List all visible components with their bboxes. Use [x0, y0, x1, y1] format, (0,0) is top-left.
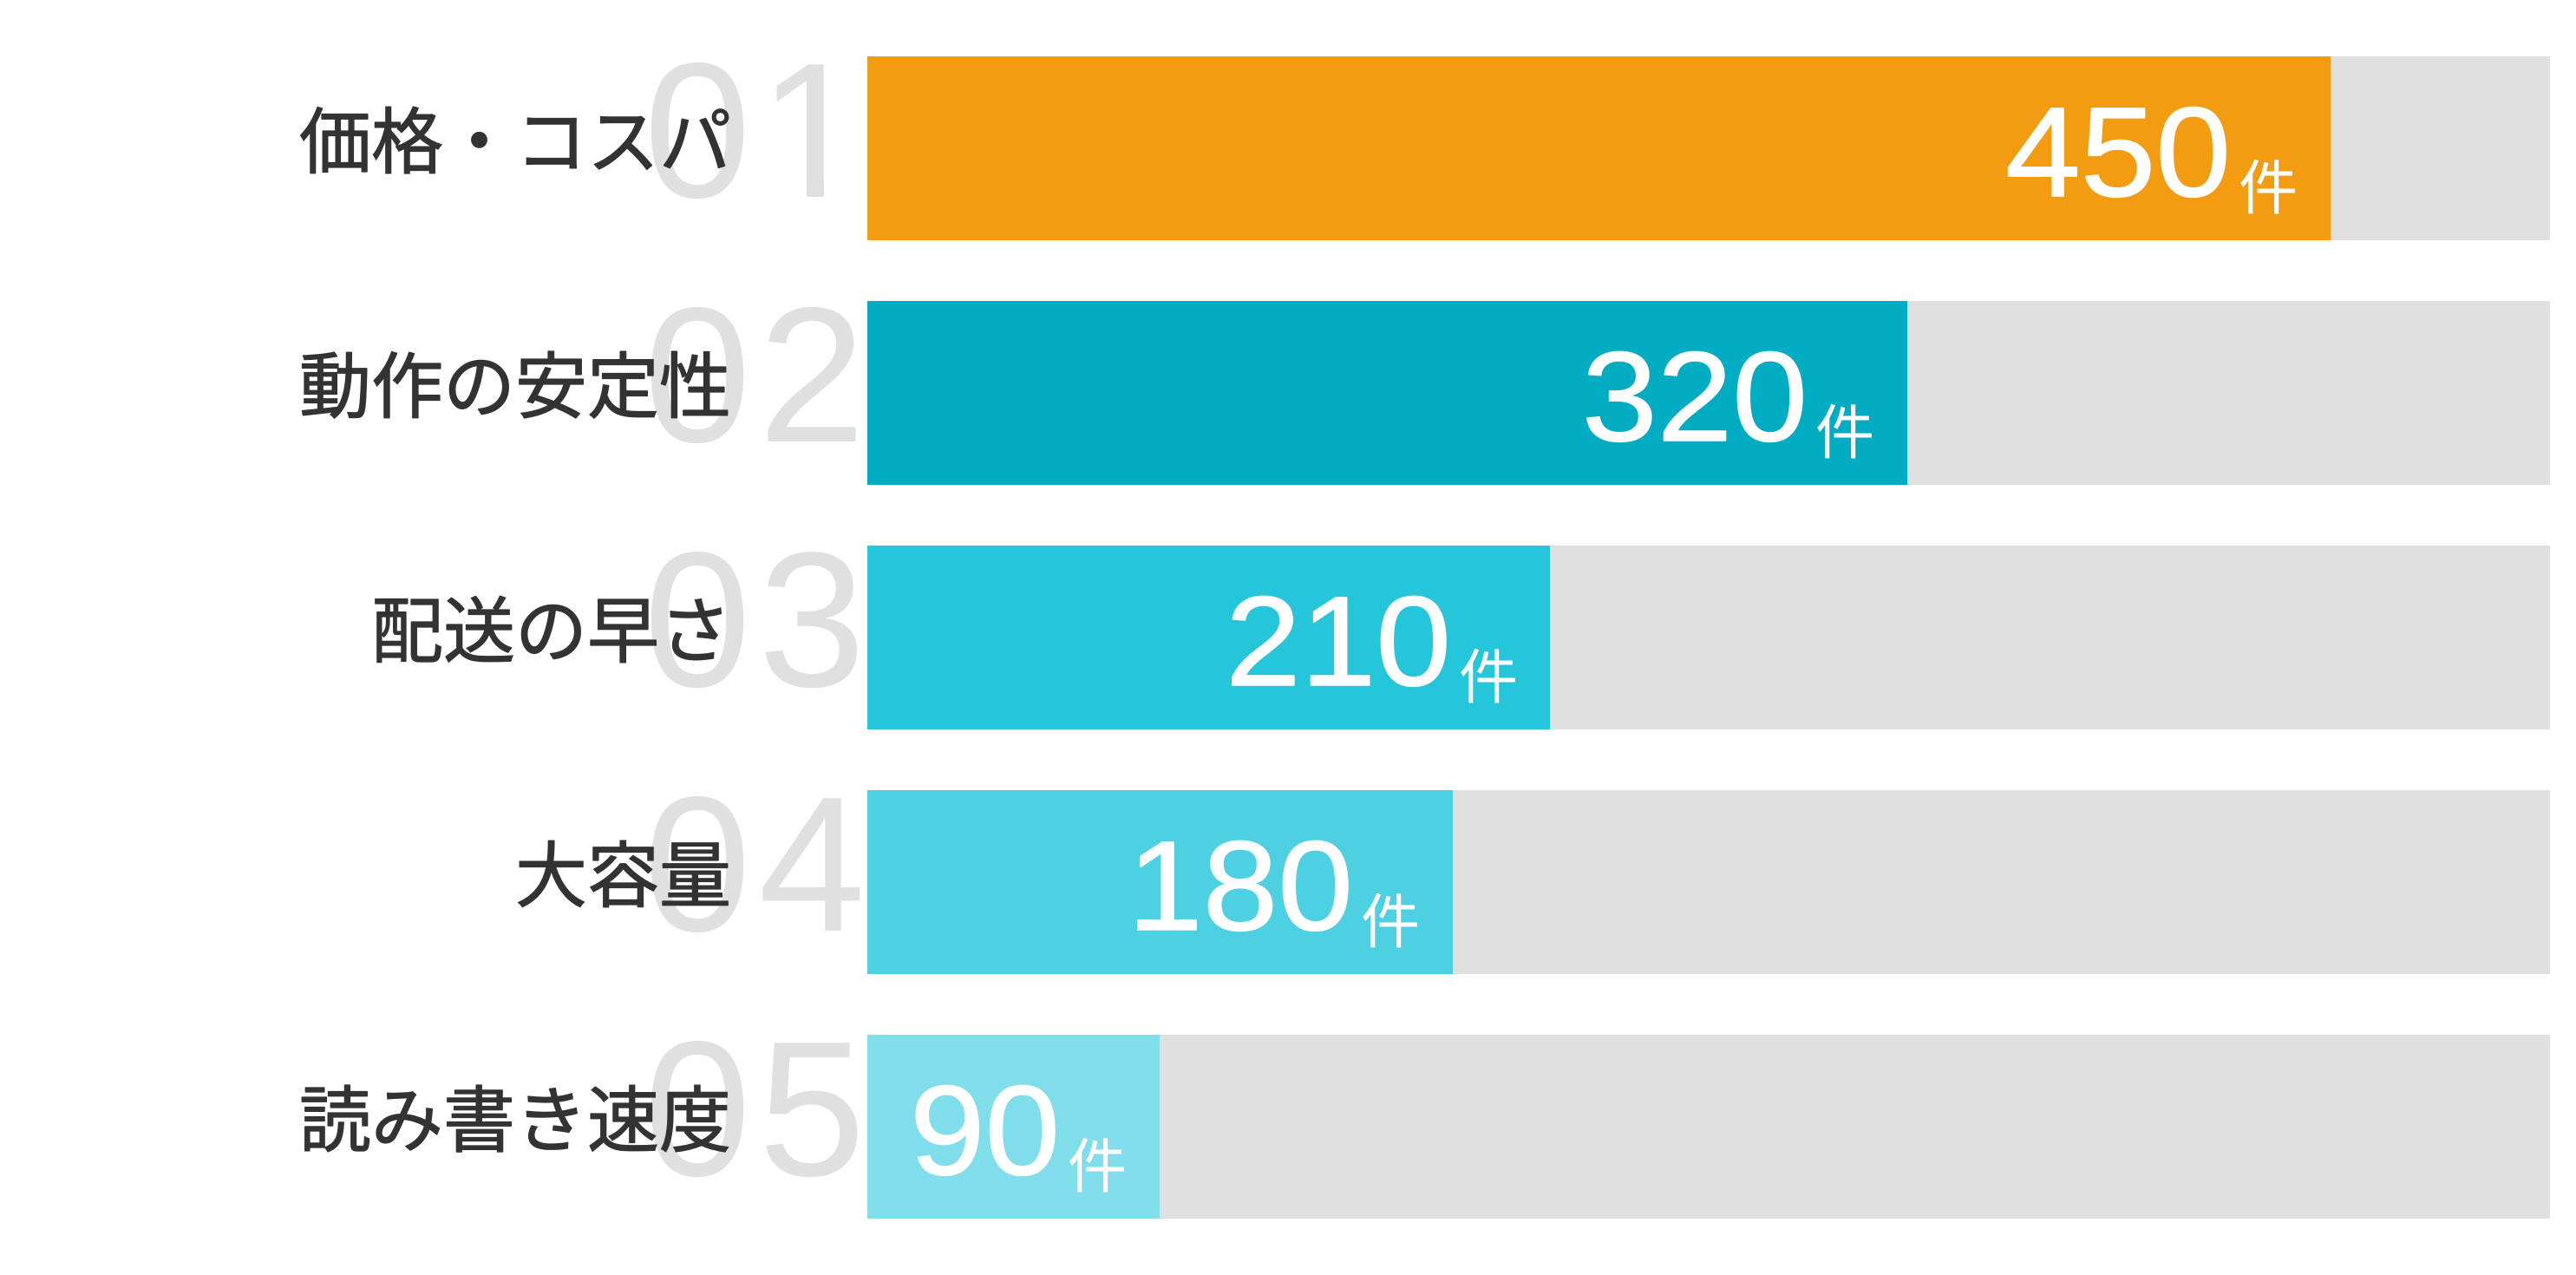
bar 1: 450 — [867, 56, 2331, 240]
row 3: delivery speed — [371, 513, 2550, 729]
unit 1: 件 — [2239, 156, 2298, 222]
label: large capacity: 大容量 — [515, 836, 731, 917]
bar 4: 180 — [867, 790, 1453, 974]
bar track 3 — [867, 546, 2550, 729]
value 210: 210 — [1226, 571, 1451, 713]
bar 2: 320 — [867, 301, 1907, 485]
rank number 05: 05 — [644, 1002, 866, 1217]
unit 2: 件 — [1815, 401, 1874, 467]
row 4: large capacity — [515, 757, 2550, 974]
rank number 01: 01 — [644, 23, 866, 239]
label: stability: 動作の安定性 — [299, 347, 731, 428]
label: read/write speed: 読み書き速度 — [299, 1081, 731, 1161]
rank number 02: 02 — [644, 268, 866, 483]
bar 3: 210 — [867, 546, 1550, 729]
bar track 2 — [867, 301, 2550, 485]
rank number 03: 03 — [644, 513, 866, 728]
unit 3: 件 — [1459, 645, 1518, 711]
row 1: price and value — [300, 56, 2550, 240]
row 5: read/write speed — [299, 1002, 2550, 1219]
bar track 5 — [867, 1035, 2550, 1219]
row 2: stability — [299, 268, 2550, 485]
unit 4: 件 — [1361, 890, 1420, 956]
bar track 1 — [867, 56, 2550, 240]
label: price and value: 価格・コスパ — [299, 102, 731, 183]
label: delivery speed: 配送の早さ — [371, 592, 731, 672]
unit 5: 件 — [1068, 1134, 1127, 1200]
rank number 04: 04 — [644, 757, 866, 972]
value 90: 90 — [910, 1060, 1060, 1202]
value 320: 320 — [1582, 326, 1808, 468]
bar 5: 90 — [867, 1035, 1160, 1219]
bar track 4 — [867, 790, 2550, 974]
value 180: 180 — [1128, 815, 1353, 958]
value 450: 450 — [2005, 82, 2231, 224]
